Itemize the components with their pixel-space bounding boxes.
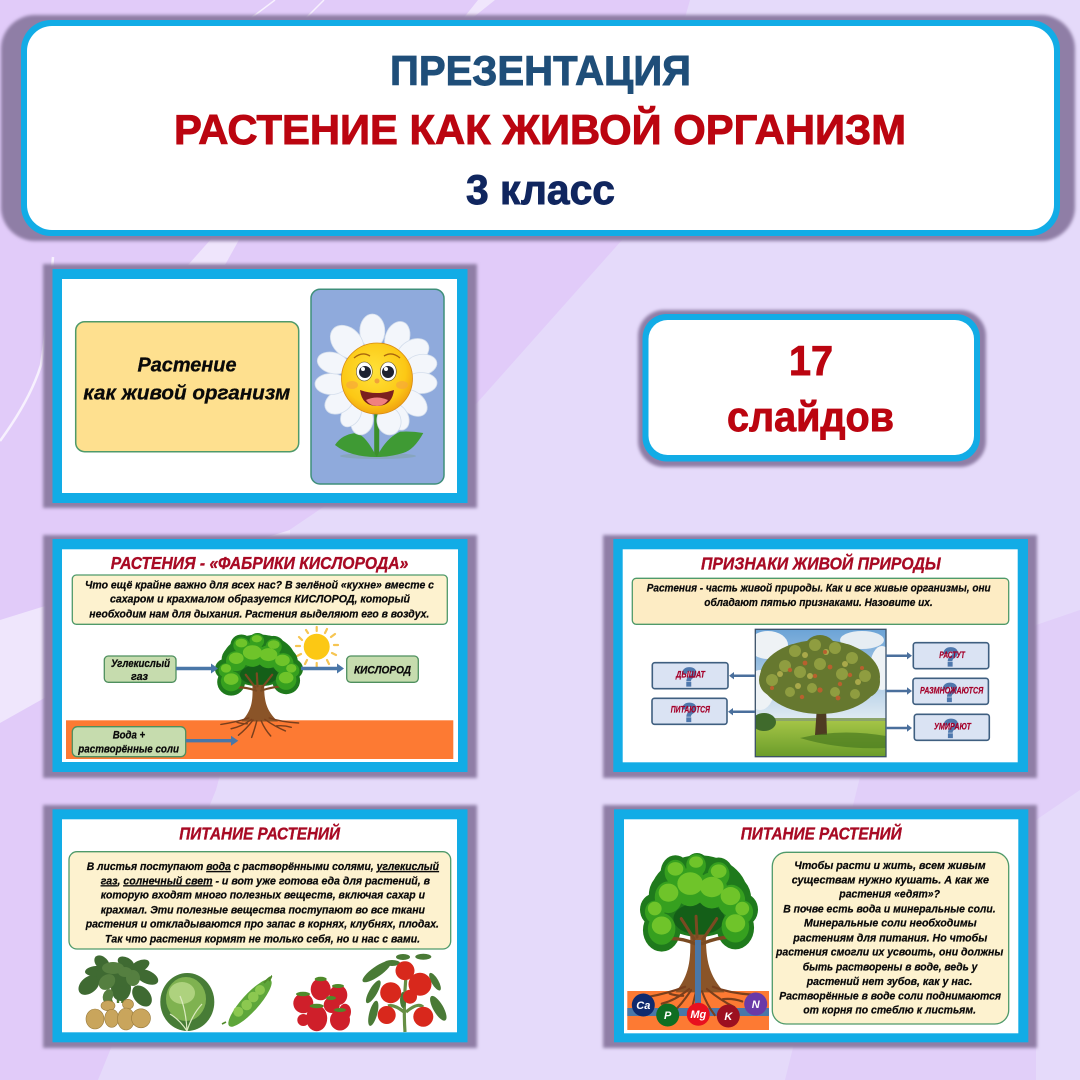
arrow: water to roots — [186, 736, 238, 746]
text box — [69, 852, 451, 949]
slide count label: слайдов — [727, 393, 894, 440]
panel: slide 1 title slide — [43, 264, 477, 508]
yellow text box: Растение — [138, 354, 236, 376]
text box — [772, 852, 1009, 1024]
label: grow: РАСТУТ — [939, 650, 966, 660]
yellow text box — [76, 322, 299, 452]
soil band — [66, 720, 453, 759]
text box: Что ещё крайне важно для всех нас? В зелёной «кухне» вместе с — [85, 580, 435, 592]
label: carbon dioxide: Углекислый — [111, 658, 170, 670]
soil band — [627, 991, 769, 1030]
icon: pea pod — [222, 974, 277, 1032]
mineral: potassium — [717, 1004, 740, 1028]
label: die — [914, 713, 989, 743]
mineral: potassium: K — [724, 1011, 733, 1023]
label: water and dissolved salts: растворённые соли — [77, 744, 179, 756]
label: reproduce: РАЗМНОЖАЮТСЯ — [920, 685, 984, 695]
mineral: phosphorus — [656, 1004, 679, 1026]
mineral: nitrogen — [744, 992, 767, 1016]
text box: Растения - часть живой природы. Как и все живые организмы, они — [647, 583, 991, 595]
slide count panel — [638, 310, 986, 467]
slide heading: РАСТЕНИЯ - «ФАБРИКИ КИСЛОРОДА» — [111, 553, 409, 573]
slide count number: 17 — [789, 337, 833, 384]
label: reproduce: ? — [942, 678, 958, 708]
panel: slide 2 oxygen factories — [43, 535, 477, 778]
text box: растений нет зубов, как у нас. — [806, 976, 972, 988]
icon: tomato plant — [360, 954, 450, 1032]
mineral: magnesium: Mg — [690, 1009, 707, 1021]
arrows: tree to labels — [728, 652, 912, 732]
label: water and dissolved salts: Вода + — [113, 730, 146, 742]
text box: обладают пятью признаками. Назовите их. — [704, 597, 933, 609]
text box: существам нужно кушать. А как же — [792, 874, 989, 886]
text box: В почве есть вода и минеральные соли. — [783, 903, 996, 915]
panel: slide 5 plant nutrition with minerals — [603, 805, 1037, 1048]
mineral: nitrogen: N — [752, 999, 761, 1011]
label: grow — [913, 642, 989, 672]
label: feed: ? — [681, 698, 697, 728]
heading: presentation: ПРЕЗЕНТАЦИЯ — [390, 47, 691, 94]
text box: необходим нам для дыхания. Растения выделяют его в воздух. — [89, 608, 429, 620]
text box: газ, солнечный свет - и вот уже готова еда для растений, в — [101, 875, 430, 887]
label: water and dissolved salts — [72, 727, 186, 757]
label: die: УМИРАЮТ — [934, 721, 972, 731]
text box: растения смогли их усвоить, они должны — [775, 947, 1004, 959]
slide heading: ПИТАНИЕ РАСТЕНИЙ — [179, 822, 340, 843]
title panel — [1, 15, 1075, 241]
text box: быть растворены в воде, ведь у — [803, 962, 978, 974]
label: oxygen: КИСЛОРОД — [354, 664, 411, 676]
label: carbon dioxide — [104, 656, 176, 683]
text box: крахмал. Эти полезные вещества поступают во все ткани — [101, 904, 425, 916]
label: grow: ? — [943, 642, 959, 672]
text box: растения и откладываются про запас в корнях, клубнях, плодах. — [85, 919, 439, 931]
icon: strawberries — [293, 977, 351, 1031]
heading: topic: РАСТЕНИЕ КАК ЖИВОЙ ОРГАНИЗМ — [174, 105, 906, 153]
yellow text box: как живой организм — [83, 382, 291, 404]
photo: apple tree in a meadow — [746, 629, 894, 757]
icon: cabbage — [160, 973, 214, 1031]
text box: Растворённые в воде соли поднимаются — [779, 990, 1001, 1002]
icon: potato plant — [75, 952, 161, 1030]
label: die: ? — [943, 713, 959, 743]
icon: smiling daisy — [315, 314, 439, 459]
panel: slide 3 signs of living nature — [603, 535, 1037, 778]
arrow: tree to oxygen — [301, 664, 344, 674]
text box: от корня по стеблю к листьям. — [803, 1004, 976, 1016]
text box — [72, 575, 447, 624]
label: breathe: ДЫШАТ — [675, 669, 706, 679]
icon: tree with water stem — [640, 853, 758, 1017]
label: oxygen — [347, 656, 418, 682]
icon: tree — [215, 633, 303, 737]
text box: сахаром и крахмалом образуется КИСЛОРОД, который — [110, 594, 410, 606]
text box: которую входят много полезных веществ, включая сахар и — [101, 889, 425, 901]
heading: grade: 3 класс — [466, 166, 615, 213]
label: breathe — [652, 662, 728, 692]
label: reproduce — [913, 678, 988, 708]
text box: Минеральные соли необходимы — [804, 918, 977, 930]
slide heading: ПИТАНИЕ РАСТЕНИЙ — [741, 822, 902, 843]
mineral: calcium: Ca — [636, 1000, 650, 1012]
text box: растениям для питания. Но чтобы — [792, 933, 988, 945]
text box: В листья поступают вода с растворёнными солями, углекислый — [87, 861, 439, 873]
blue image panel — [311, 289, 444, 484]
label: breathe: ? — [681, 662, 697, 692]
arrow: carbon dioxide to tree — [176, 664, 218, 674]
text box: Так что растения кормят не только себя, но и нас с вами. — [105, 933, 420, 945]
mineral: calcium — [632, 994, 655, 1016]
panel: slide 4 plant nutrition with vegetables — [43, 805, 477, 1048]
text box: Чтобы расти и жить, всем живым — [794, 860, 986, 872]
slide heading: ПРИЗНАКИ ЖИВОЙ ПРИРОДЫ — [701, 552, 941, 573]
mineral: magnesium — [687, 1003, 710, 1026]
mineral: phosphorus: P — [664, 1010, 672, 1022]
text box: растения «едят»? — [838, 889, 940, 901]
label: carbon dioxide: газ — [131, 671, 148, 683]
text box — [632, 578, 1009, 624]
label: feed — [652, 698, 727, 728]
label: feed: ПИТАЮТСЯ — [671, 705, 710, 715]
icon: sun — [296, 627, 338, 667]
